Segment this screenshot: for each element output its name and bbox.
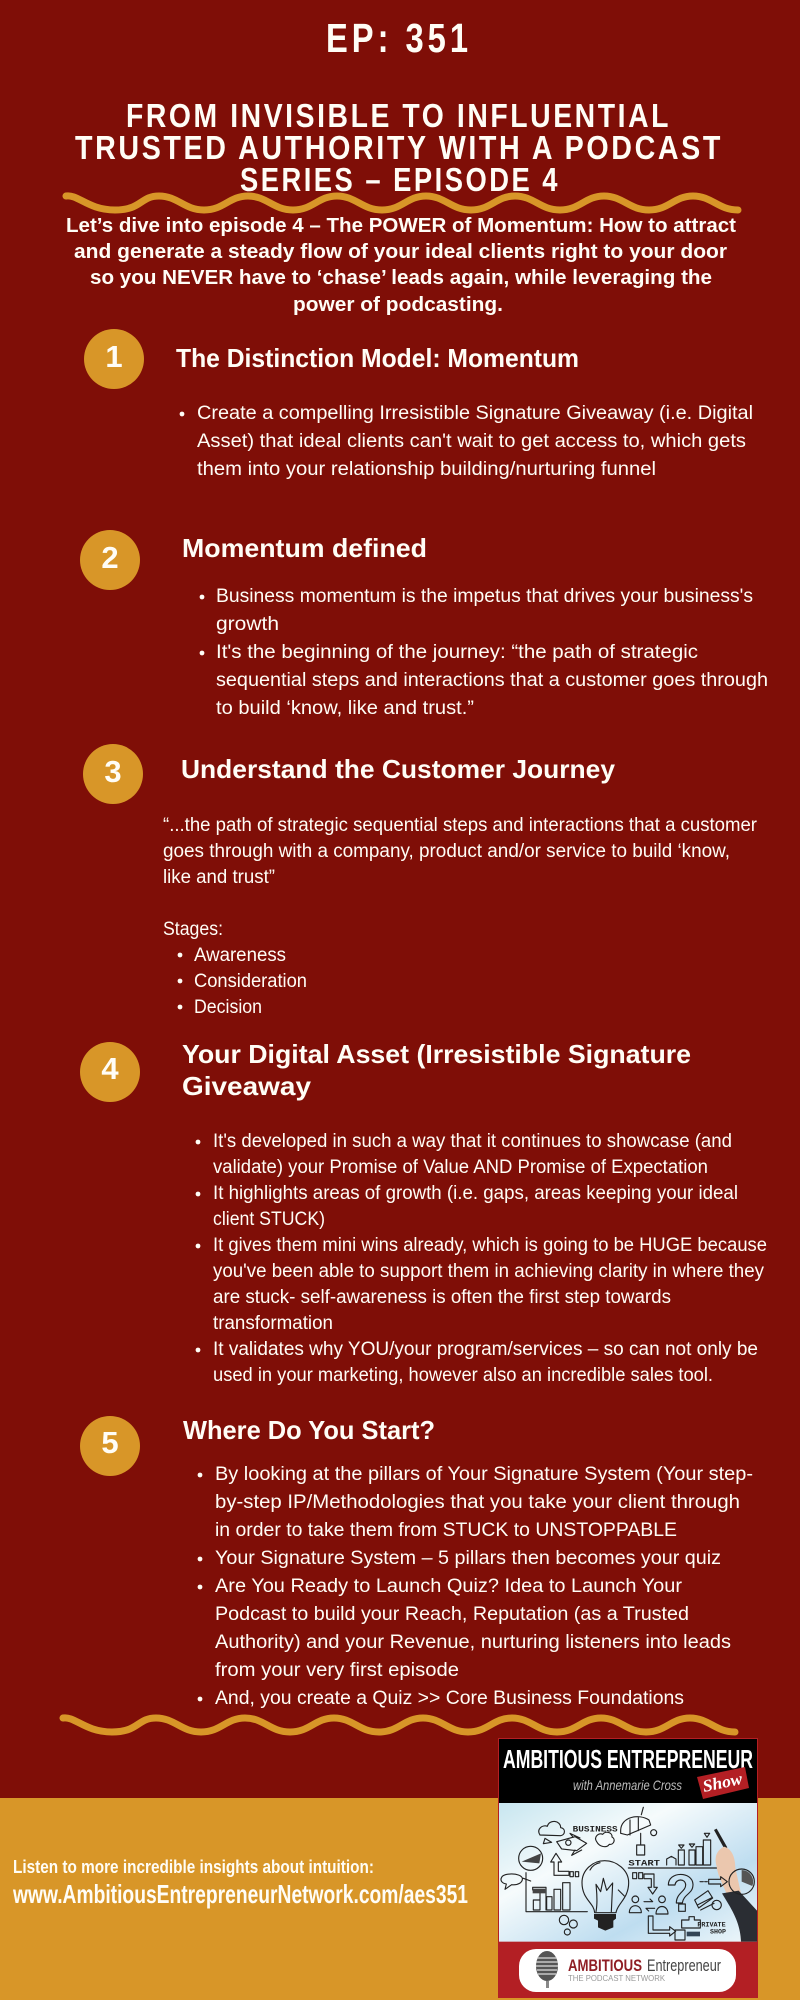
body 4: It highlights areas of growth (i.e. gaps, areas keeping your ideal — [213, 1183, 738, 1204]
episode number: EP: 351 — [326, 15, 472, 61]
puzzle and text — [675, 1917, 726, 1940]
body 5: in order to take them from STUCK to UNSTOPPABLE — [215, 1520, 677, 1541]
gears — [559, 1915, 577, 1935]
body 2: growth — [216, 614, 279, 635]
number badge 5: 5 — [101, 1425, 119, 1460]
heading 4: Giveaway — [182, 1071, 312, 1101]
network logo pill: THE PODCAST NETWORK — [568, 1974, 666, 1983]
footer call to action: www.AmbitiousEntrepreneurNetwork.com/aes351 — [12, 1879, 468, 1909]
network logo pill — [519, 1949, 736, 1992]
title — [75, 97, 723, 198]
body 5: Authority) and your Revenue, nurturing listeners into leads — [215, 1632, 731, 1653]
microphone icon — [536, 1951, 558, 1988]
network logo pill: AMBITIOUS — [568, 1956, 642, 1975]
body 4: It validates why YOU/your program/services – so can not only be — [213, 1339, 758, 1360]
dome and arrow — [621, 1807, 657, 1855]
heading 4: Your Digital Asset (Irresistible Signature — [182, 1039, 691, 1069]
body 4: It's developed in such a way that it continues to showcase (and — [213, 1131, 732, 1152]
intro paragraph: and generate a steady flow of your ideal clients right to your door — [74, 241, 727, 263]
puzzle and text: SHOP — [710, 1928, 726, 1935]
body 4: you've been able to support them in achieving clarity in where they — [213, 1261, 764, 1282]
intro paragraph: power of podcasting. — [293, 294, 503, 316]
network logo pill: Entrepreneur — [647, 1956, 721, 1975]
title: SERIES – EPISODE 4 — [240, 161, 560, 198]
cover header — [499, 1739, 757, 1803]
body 2: It's the beginning of the journey: “the path of strategic — [216, 642, 698, 663]
angled arrow — [648, 1916, 676, 1936]
number badge 1: 1 — [105, 339, 123, 374]
body 5: By looking at the pillars of Your Signature System (Your step- — [215, 1464, 753, 1485]
cloud and rocket: BUSINESS — [573, 1826, 618, 1835]
cover background — [498, 1738, 758, 1998]
body 3: “...the path of strategic sequential steps and interactions that a customer — [163, 815, 758, 836]
body 4: transformation — [213, 1313, 333, 1334]
body 4: used in your marketing, however also an incredible sales tool. — [213, 1365, 713, 1386]
body 5: from your very first episode — [215, 1660, 459, 1681]
heading 2: Momentum defined — [182, 533, 427, 563]
start label and bar graph: START — [628, 1860, 660, 1869]
title: TRUSTED AUTHORITY WITH A PODCAST — [75, 129, 723, 166]
number badge 3 — [83, 744, 143, 804]
body 2: sequential steps and interactions that a customer goes through — [216, 670, 768, 691]
light bulb — [582, 1861, 629, 1931]
section 3: understand the customer journey — [83, 744, 758, 1018]
body 2 — [200, 586, 768, 719]
body 2: to build ‘know, like and trust.” — [216, 698, 474, 719]
pie chart — [729, 1869, 754, 1894]
body 1: Create a compelling Irresistible Signature Giveaway (i.e. Digital — [197, 403, 753, 424]
body 5 — [198, 1464, 753, 1709]
puzzle and text: PRIVATE — [697, 1922, 726, 1929]
body 5: Are You Ready to Launch Quiz? Idea to Launch Your — [215, 1576, 683, 1597]
footer band — [0, 1798, 800, 2000]
wavy divider: bottom — [63, 1718, 735, 1732]
number badge 5 — [80, 1416, 140, 1476]
footer call to action: Listen to more incredible insights about intuition: — [13, 1857, 374, 1877]
body 4: client STUCK) — [213, 1209, 325, 1230]
heading 3: Understand the Customer Journey — [181, 754, 616, 784]
section 1: the distinction model — [84, 329, 753, 480]
body 5: by-step IP/Methodologies that you take your client through — [215, 1492, 740, 1513]
title: FROM INVISIBLE TO INFLUENTIAL — [126, 97, 671, 134]
number badge 4: 4 — [101, 1051, 119, 1086]
body 3: Consideration — [194, 971, 307, 992]
body 5: Podcast to build your Reach, Reputation (as a Trusted — [215, 1604, 689, 1625]
body 1 — [180, 403, 753, 480]
body 1: them into your relationship building/nurturing funnel — [197, 459, 656, 480]
gauge and speech bubbles — [501, 1846, 543, 1889]
body 3: Stages: — [163, 919, 223, 940]
show badge: Show — [701, 1769, 745, 1796]
heading 5: Where Do You Start? — [183, 1415, 435, 1445]
start label and bar graph — [628, 1833, 717, 1869]
intro paragraph — [66, 215, 736, 316]
section 4: your digital asset — [80, 1039, 767, 1386]
section 5: where do you start — [80, 1415, 753, 1709]
intro paragraph: so you NEVER have to ‘chase’ leads again, while leveraging the — [90, 267, 712, 289]
show badge — [697, 1767, 749, 1799]
body 3 — [163, 815, 758, 1018]
footer call to action — [12, 1857, 468, 1909]
cover header: with Annemarie Cross — [573, 1777, 682, 1793]
podcast cover artwork — [498, 1738, 758, 1998]
money and magnifier — [695, 1877, 727, 1910]
left bar chart and arrow — [526, 1853, 587, 1912]
cloud and rocket — [539, 1821, 618, 1855]
flow arrow — [633, 1873, 657, 1894]
number badge 2 — [80, 530, 140, 590]
body 4 — [196, 1131, 767, 1386]
body 4: are stuck- self-awareness is often the first step towards — [213, 1287, 671, 1308]
body 3: Awareness — [194, 945, 286, 966]
question mark — [668, 1874, 693, 1911]
body 5: Your Signature System – 5 pillars then becomes your quiz — [215, 1548, 721, 1569]
number badge 1 — [84, 329, 144, 389]
body 3: goes through with a company, product and/or service to build ‘know, — [163, 841, 730, 862]
heading 1: The Distinction Model: Momentum — [176, 343, 579, 373]
body 5: And, you create a Quiz >> Core Business Foundations — [215, 1688, 684, 1709]
heading 4 — [182, 1039, 691, 1101]
number badge 3: 3 — [104, 754, 122, 789]
hand with pen — [714, 1829, 757, 1942]
body 4: validate) your Promise of Value AND Promise of Expectation — [213, 1157, 708, 1178]
number badge 2: 2 — [101, 540, 119, 575]
body 2: Business momentum is the impetus that drives your business's — [216, 586, 753, 607]
number badge 4 — [80, 1042, 140, 1102]
body 3: like and trust” — [163, 867, 275, 888]
body 1: Asset) that ideal clients can't wait to get access to, which gets — [197, 431, 746, 452]
section 2: momentum defined — [80, 530, 768, 719]
wavy divider: top — [66, 196, 738, 210]
people exchange — [629, 1896, 668, 1914]
intro paragraph: Let’s dive into episode 4 – The POWER of Momentum: How to attract — [66, 215, 736, 237]
body 3: Decision — [194, 997, 262, 1018]
body 4: It gives them mini wins already, which is going to be HUGE because — [213, 1235, 767, 1256]
cover illustration: business doodles — [499, 1803, 757, 1942]
